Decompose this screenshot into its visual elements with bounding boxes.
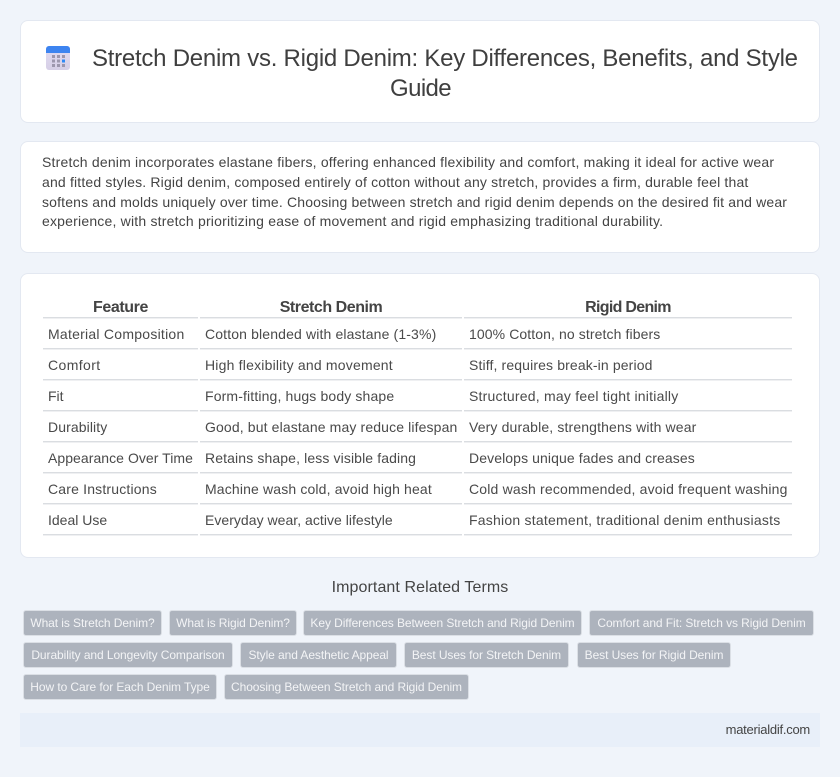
- row: Comfort: Stiff, requires break-in period: [469, 357, 653, 373]
- footer source: materialdif.com: [726, 722, 810, 737]
- related term tags: [23, 610, 814, 700]
- title: Stretch Denim vs. Rigid Denim: Key Differences, Benefits, and Style: [92, 45, 798, 72]
- row: Comfort: Comfort: [48, 357, 101, 373]
- tag: Best Uses for Stretch Denim: [412, 648, 561, 662]
- row: Care Instructions: Machine wash cold, avoid high heat: [205, 481, 432, 497]
- panel: comparison table: [20, 273, 820, 558]
- row: Material Composition: Material Composition: [48, 326, 184, 342]
- row: Ideal Use: Everyday wear, active lifestyle: [205, 512, 393, 528]
- row: Fit: [43, 388, 792, 412]
- row: Fit: Fit: [48, 388, 64, 404]
- row: Ideal Use: Fashion statement, traditional denim enthusiasts: [469, 512, 780, 528]
- row: Ideal Use: Ideal Use: [48, 512, 107, 528]
- description text: experience, with stretch prioritizing ease of movement and rigid emphasizing traditional durability.: [42, 213, 663, 229]
- comparison table: [43, 299, 792, 536]
- heading: Important Related Terms: Important Related Terms: [332, 579, 508, 596]
- row: Appearance Over Time: [43, 450, 792, 474]
- row: Ideal Use: [43, 512, 792, 536]
- table header: Stretch Denim: [200, 291, 462, 318]
- row: Material Composition: [43, 326, 792, 350]
- description text: Stretch denim incorporates elastane fibers, offering enhanced flexibility and comfort, making it ideal for active wear: [42, 154, 774, 170]
- description text: softens and molds uniquely over time. Choosing between stretch and rigid denim depends on the desired fit and wear: [42, 194, 787, 210]
- description text: and fitted styles. Rigid denim, composed entirely of cotton without any stretch, provides a firm, durable feel that: [42, 174, 748, 190]
- panel: description: [20, 141, 820, 253]
- tag: [303, 610, 582, 636]
- row: Comfort: [43, 357, 792, 381]
- table header: Feature: Feature: [93, 299, 148, 316]
- row: Material Composition: Cotton blended with elastane (1-3%): [205, 326, 436, 342]
- tag: Best Uses for Rigid Denim: [585, 648, 723, 662]
- tag: How to Care for Each Denim Type: [30, 680, 210, 694]
- tag: [240, 642, 397, 668]
- title: [92, 45, 798, 102]
- icon: calendar: [46, 46, 70, 70]
- tag: What is Rigid Denim?: [176, 616, 290, 630]
- tag: [224, 674, 469, 700]
- tag: [404, 642, 569, 668]
- row: Fit: Form-fitting, hugs body shape: [205, 388, 394, 404]
- tag: Comfort and Fit: Stretch vs Rigid Denim: [597, 616, 806, 630]
- tag: Choosing Between Stretch and Rigid Denim: [231, 680, 462, 694]
- tag: Style and Aesthetic Appeal: [248, 648, 389, 662]
- tag: Durability and Longevity Comparison: [31, 648, 225, 662]
- row: Care Instructions: Cold wash recommended, avoid frequent washing: [469, 481, 788, 497]
- description text: [42, 154, 787, 229]
- row: Durability: Very durable, strengthens with wear: [469, 419, 696, 435]
- table header: Stretch Denim: Stretch Denim: [280, 299, 382, 316]
- row: Appearance Over Time: Develops unique fades and creases: [469, 450, 695, 466]
- table header: Rigid Denim: [464, 291, 792, 318]
- table header: Feature: [43, 291, 198, 318]
- tag: [577, 642, 731, 668]
- tag: [23, 642, 233, 668]
- tag: Key Differences Between Stretch and Rigid Denim: [310, 616, 575, 630]
- tag: [589, 610, 814, 636]
- row: Appearance Over Time: Retains shape, less visible fading: [205, 450, 416, 466]
- row: Comfort: High flexibility and movement: [205, 357, 393, 373]
- row: Care Instructions: [43, 481, 792, 505]
- footer bar: [20, 713, 820, 747]
- row: Durability: [43, 419, 792, 443]
- row: Fit: Structured, may feel tight initially: [469, 388, 678, 404]
- title: Guide: [390, 75, 451, 102]
- panel: header: [20, 20, 820, 123]
- tag: [23, 610, 162, 636]
- tag: [23, 674, 217, 700]
- row: Durability: Durability: [48, 419, 107, 435]
- row: Care Instructions: Care Instructions: [48, 481, 157, 497]
- row: Material Composition: 100% Cotton, no stretch fibers: [469, 326, 660, 342]
- tag: [169, 610, 297, 636]
- table header: Rigid Denim: Rigid Denim: [585, 299, 671, 316]
- row: Appearance Over Time: Appearance Over Time: [48, 450, 193, 466]
- tag: What is Stretch Denim?: [30, 616, 155, 630]
- row: Durability: Good, but elastane may reduce lifespan: [205, 419, 457, 435]
